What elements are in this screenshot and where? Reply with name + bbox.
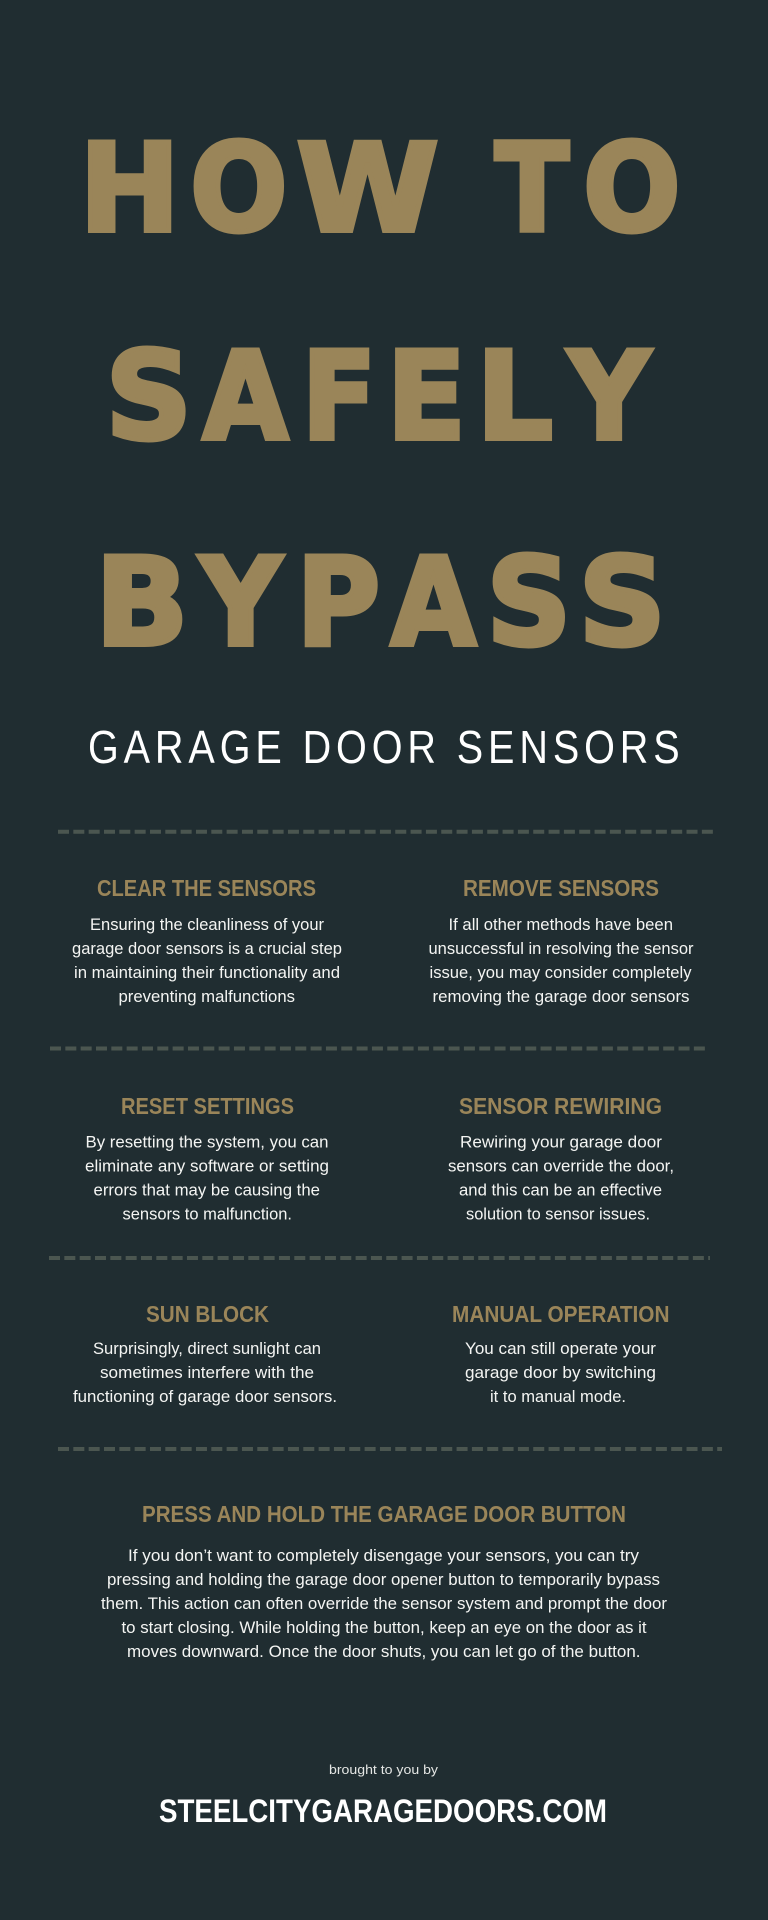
title line: BYPASS: S	[579, 532, 666, 674]
text block: clear the sensors	[72, 916, 342, 1006]
title line: HOW TO	[80, 118, 680, 260]
heading: press and hold: PRESS AND HOLD THE GARAGE DOOR BUTTON	[142, 1501, 626, 1527]
heading: sensor rewiring: SENSOR REWIRING	[459, 1093, 662, 1119]
title line: BYPASS: Y	[198, 532, 283, 673]
text block: reset settings: By resetting the system, you can	[86, 1134, 328, 1152]
subtitle: GARAGE DOOR SENSORS	[88, 722, 680, 774]
text block: remove sensors: If all other methods have been	[448, 916, 673, 934]
text block: sensor rewiring: Rewiring your garage door	[460, 1134, 663, 1152]
text block: sensor rewiring: sensors can override the door,	[448, 1158, 674, 1176]
text block: press and hold: to start closing. While holding the button, keep an eye on the door as it	[122, 1619, 647, 1637]
text block: remove sensors: issue, you may consider completely	[430, 964, 692, 982]
text block: sensor rewiring: and this can be an effective	[459, 1182, 662, 1200]
text block: remove sensors: unsuccessful in resolving the sensor	[428, 940, 694, 958]
heading: reset settings: RESET SETTINGS	[121, 1093, 294, 1119]
title line: HOW TO: T	[495, 120, 569, 260]
text block: sun block	[73, 1340, 337, 1406]
text block: press and hold: them. This action can often override the sensor system and prompt the door	[101, 1595, 668, 1613]
panel: sensor rewiring	[448, 1093, 674, 1224]
panel: manual operation	[452, 1301, 670, 1406]
text block: press and hold	[101, 1547, 668, 1661]
text block: press and hold: pressing and holding the garage door opener button to temporarily bypass	[107, 1571, 660, 1589]
title line: SAFELY: L	[476, 327, 553, 468]
text block: reset settings: errors that may be causing the	[94, 1182, 320, 1200]
text block: press and hold: If you don’t want to completely disengage your sensors, you can try	[128, 1547, 640, 1565]
text block: clear the sensors: Ensuring the cleanliness of your	[90, 916, 324, 934]
heading: remove sensors: REMOVE SENSORS	[463, 875, 659, 901]
footer label: brought to you by	[329, 1762, 439, 1777]
text block: reset settings: sensors to malfunction.	[122, 1206, 292, 1224]
footer website: STEELCITYGARAGEDOORS.COM	[159, 1793, 607, 1829]
title line: BYPASS: P	[297, 532, 380, 673]
title line: HOW TO: O	[190, 118, 287, 259]
text block: manual operation: garage door by switching	[465, 1364, 656, 1382]
text block: reset settings	[85, 1134, 329, 1224]
text block: sun block: Surprisingly, direct sunlight can	[93, 1340, 321, 1358]
text block: clear the sensors: preventing malfunctions	[118, 988, 295, 1006]
text block: manual operation: it to manual mode.	[490, 1388, 626, 1406]
title line: SAFELY: E	[387, 326, 466, 467]
panel: press and hold	[101, 1501, 668, 1661]
heading: clear the sensors: CLEAR THE SENSORS	[97, 875, 316, 901]
text block: sun block: sometimes interfere with the	[100, 1364, 314, 1382]
panel: remove sensors	[428, 875, 694, 1006]
text block: clear the sensors: in maintaining their functionality and	[74, 964, 340, 982]
text block: remove sensors	[428, 916, 694, 1006]
title line: BYPASS: B	[95, 532, 188, 673]
title line: HOW TO: O	[583, 118, 680, 259]
title: How to Safely Bypass	[80, 118, 680, 674]
panel: clear the sensors	[72, 875, 342, 1006]
text block: manual operation	[465, 1340, 657, 1406]
title line: HOW TO: H	[80, 119, 180, 260]
panel: reset settings	[85, 1093, 329, 1224]
text block: sensor rewiring: solution to sensor issues.	[466, 1206, 650, 1224]
text block: manual operation: You can still operate your	[465, 1340, 657, 1358]
text block: sensor rewiring	[448, 1134, 674, 1224]
title line: BYPASS: S	[487, 533, 571, 674]
text block: sun block: functioning of garage door sensors.	[73, 1388, 337, 1406]
text block: press and hold: moves downward. Once the door shuts, you can let go of the button.	[127, 1643, 640, 1661]
title line: HOW TO: W	[297, 119, 439, 260]
text block: clear the sensors: garage door sensors is a crucial step	[72, 940, 342, 958]
title line: SAFELY: F	[302, 327, 376, 468]
title line: SAFELY: A	[203, 328, 288, 468]
title line: BYPASS	[95, 532, 666, 674]
panel: sun block	[73, 1301, 337, 1406]
heading: sun block: SUN BLOCK	[146, 1301, 269, 1327]
title line: SAFELY: S	[106, 327, 192, 468]
title line: SAFELY: Y	[566, 326, 651, 467]
text block: reset settings: eliminate any software or setting	[85, 1158, 329, 1176]
heading: manual operation: MANUAL OPERATION	[452, 1301, 670, 1327]
title line: BYPASS: A	[391, 534, 476, 674]
text block: remove sensors: removing the garage door sensors	[432, 988, 690, 1006]
title line: SAFELY	[106, 326, 651, 468]
